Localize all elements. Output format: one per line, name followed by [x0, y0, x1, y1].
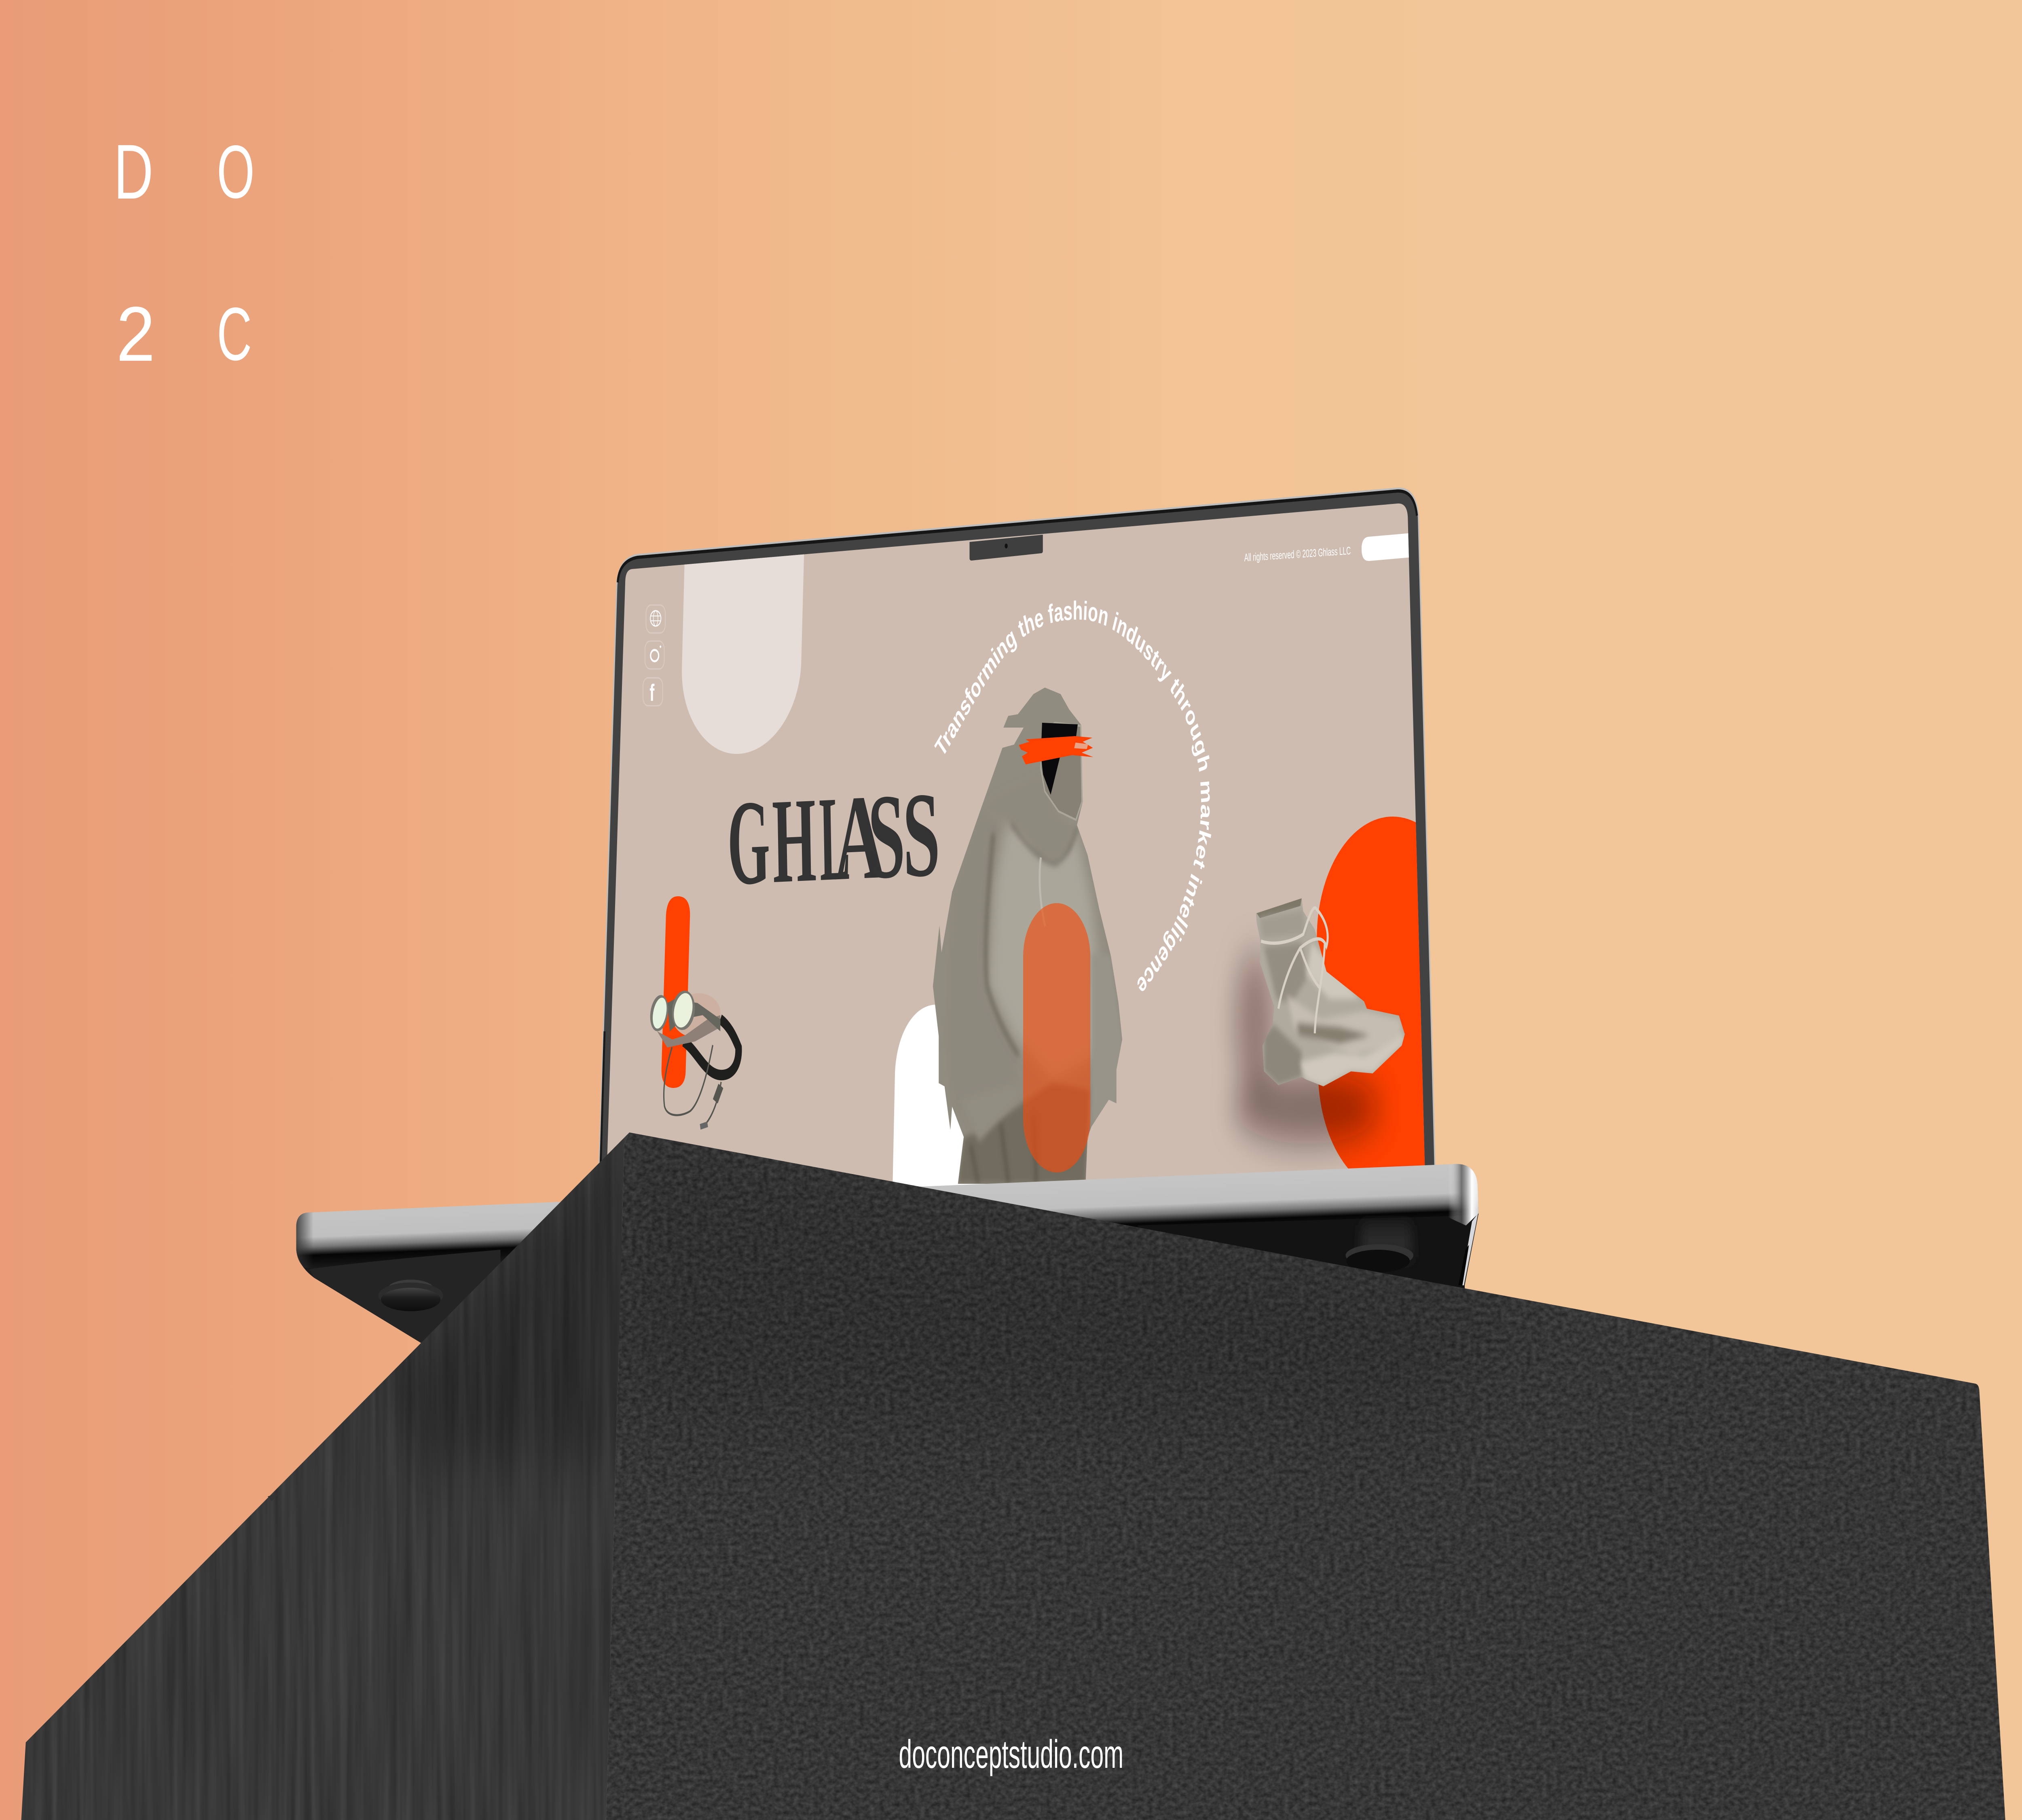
shoe laces [1261, 908, 1328, 1033]
laptop screen [607, 503, 1425, 1192]
logo letter D: D [114, 129, 153, 216]
website url: doconceptstudio.com [899, 1732, 1123, 1777]
pedestal right face [582, 1112, 2022, 1820]
logo: D O 2 C [114, 129, 255, 377]
pale semi-arch behind figure [892, 1005, 998, 1205]
social icons [643, 605, 665, 706]
goggle cables [664, 1045, 721, 1126]
red pill left [662, 896, 690, 1088]
base underside [310, 1250, 501, 1347]
base right underside [1137, 1215, 1474, 1302]
copyright text: All rights reserved © 2023 Ghlass LLC [1244, 544, 1351, 564]
logo letter O: O [217, 130, 255, 214]
brand wordmark GHLASS: S [867, 768, 906, 904]
shoe shading [1257, 898, 1405, 1086]
shoe [1256, 898, 1405, 1086]
orange brush stroke over eyes [1019, 736, 1093, 764]
icon: instagram [645, 641, 664, 669]
goggle strap [684, 1019, 738, 1075]
dark pedestal block [0, 1112, 2022, 1820]
laptop base [296, 1164, 1478, 1351]
base corner shading left [296, 1212, 313, 1268]
hooded figure [933, 688, 1122, 1184]
base right edge rim [1461, 1213, 1478, 1285]
logo letter C: C [217, 292, 252, 376]
tagline text on curve: Transforming the fashion industry through market intelligence [932, 596, 1216, 1001]
logo numeral 2: 2 [116, 291, 155, 377]
translucent orange pill [1023, 903, 1090, 1172]
laptop [296, 485, 1478, 1351]
brand wordmark GHLASS: H [771, 772, 817, 909]
camera lens [1005, 544, 1008, 548]
hood lining [1041, 723, 1082, 820]
goggle lenses [647, 991, 671, 1035]
goggle body [672, 991, 721, 1039]
brand wordmark GHLASS: L [818, 770, 851, 906]
base body [296, 1164, 1478, 1351]
brand wordmark GHLASS [726, 766, 941, 911]
white pill top right [1362, 532, 1420, 561]
shoe shadow [1233, 950, 1380, 1144]
brand wordmark GHLASS: G [726, 775, 771, 911]
pedestal edge chip [268, 1492, 281, 1501]
figure silhouette [933, 688, 1122, 1184]
rubber foot right [1346, 1225, 1413, 1272]
port slot [1458, 1245, 1469, 1285]
pale arch top left [682, 546, 804, 754]
base corner highlight right [1448, 1164, 1478, 1225]
hood opening [1041, 723, 1078, 795]
brand wordmark GHLASS: S [902, 767, 941, 903]
webcam notch [970, 535, 1043, 561]
icon: facebook: f [649, 680, 655, 706]
icon: globe [646, 605, 665, 633]
shoe silhouette [1256, 898, 1405, 1086]
rubber foot left [379, 1280, 443, 1311]
large red arch right [1317, 817, 1470, 1193]
laptop lid bezel [599, 489, 1436, 1193]
brand wordmark GHLASS: A [832, 769, 886, 906]
VR goggles [647, 984, 738, 1130]
screen background [594, 485, 1440, 1213]
figure shading [945, 775, 1122, 1184]
pedestal left face [0, 1112, 657, 1820]
icon: facebook [643, 678, 663, 706]
